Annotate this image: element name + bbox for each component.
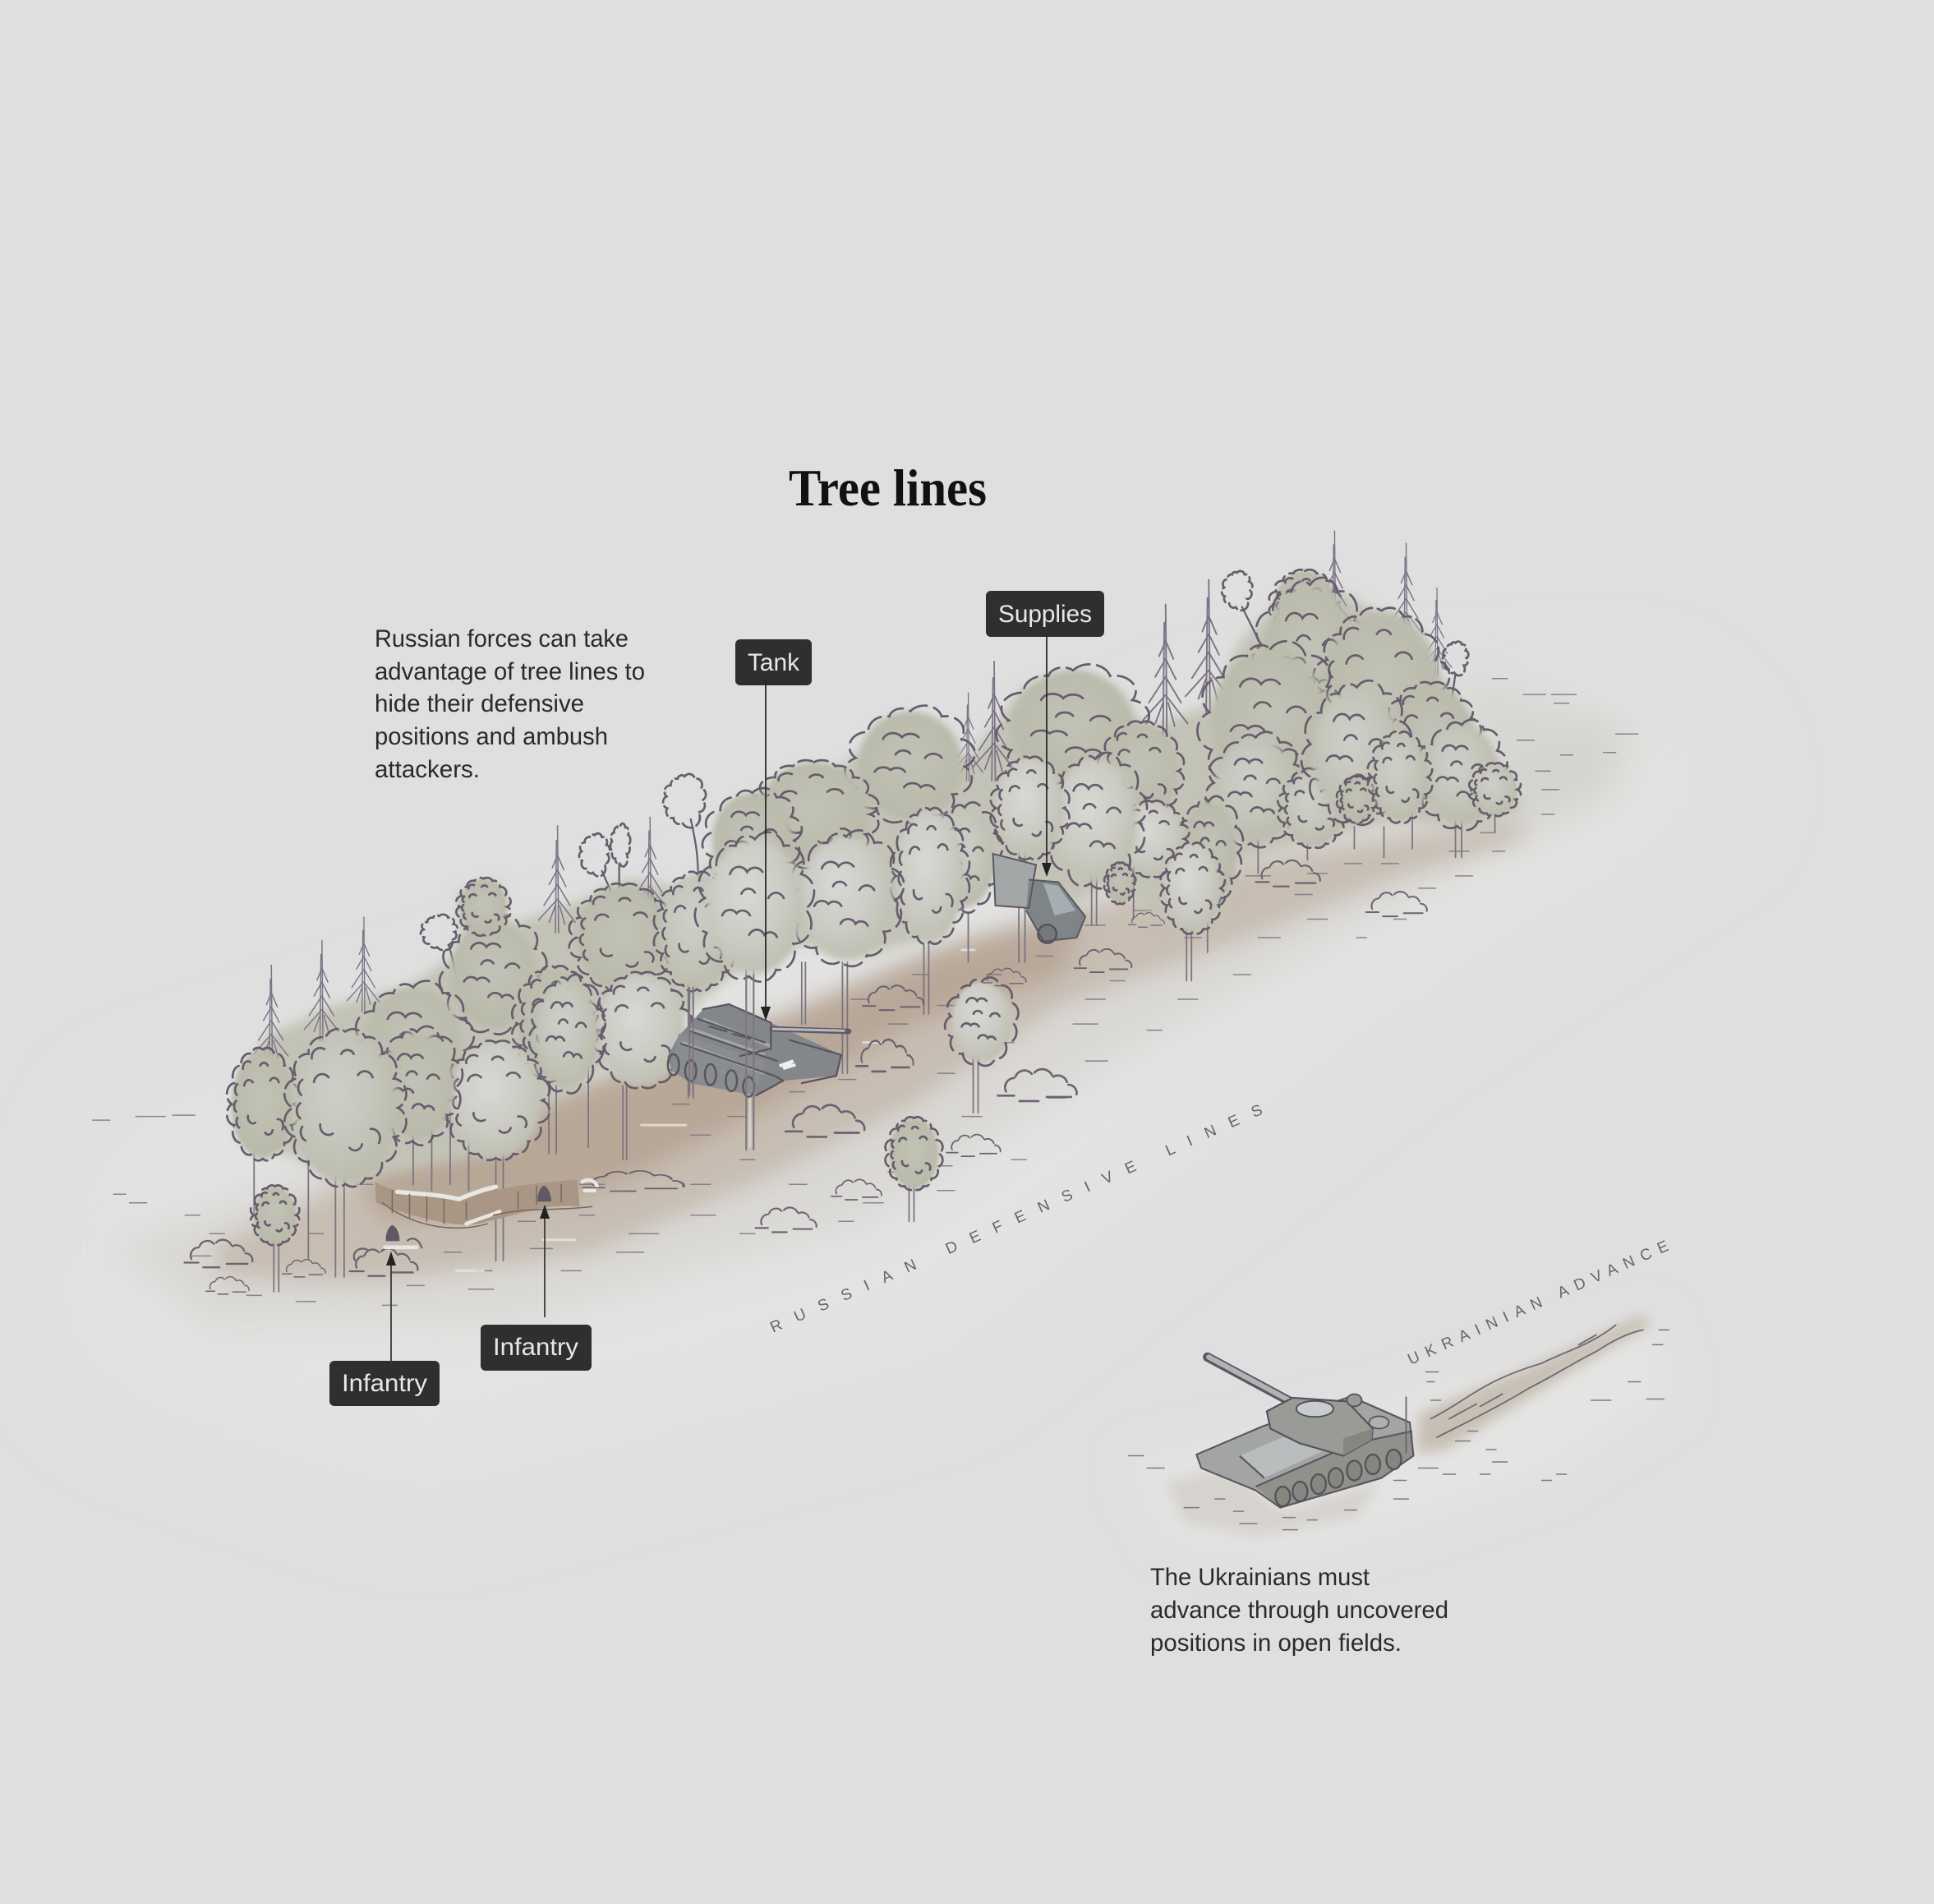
- text block: tree line description: positions and ambush: [375, 723, 608, 750]
- rotated label: Russian defensive lines: RUSSIAN DEFENSIVE LINES: [767, 1101, 1265, 1337]
- forest canopy mass: [234, 574, 1523, 1178]
- infantry soldier, trench: [537, 1186, 551, 1201]
- supply truck: [993, 854, 1085, 943]
- callout: Infantry right: [481, 1205, 592, 1371]
- Russian tank: [667, 1004, 849, 1097]
- illustration: Russian tree line: [49, 531, 1727, 1493]
- rotated label: Ukrainian advance: UKRAINIAN ADVANCE: [1405, 1238, 1671, 1369]
- text block: Ukrainian advance description: positions in open fields.: [1150, 1630, 1402, 1657]
- text block: tree line description: [375, 625, 645, 783]
- text block: tree line description: hide their defensive: [375, 690, 584, 717]
- ground wash: bare earth under the trees: [210, 820, 1523, 1283]
- text block: tree line description: advantage of tree lines to: [375, 658, 645, 685]
- trench: [375, 1179, 597, 1228]
- text block: tree line description: attackers.: [375, 756, 480, 783]
- ground wash: pale field: [49, 672, 1727, 1493]
- shrubs: [184, 860, 1427, 1294]
- foreground trunks over tank: [689, 975, 753, 1150]
- callout: Infantry right: Infantry: [493, 1334, 578, 1361]
- tree trunks: [254, 808, 1495, 1292]
- back row of trees: [352, 569, 1481, 1117]
- tank tracks in the mud: [1129, 1315, 1669, 1530]
- text block: Ukrainian advance description: [1150, 1564, 1448, 1657]
- background conifers: [254, 531, 1452, 1066]
- ground highlights: [456, 950, 974, 1270]
- front row of trees: [227, 680, 1521, 1187]
- illustration: Ukrainian tank and tracks: [1129, 1315, 1678, 1555]
- text block: Ukrainian advance description: The Ukrainians must: [1150, 1564, 1370, 1591]
- text block: Ukrainian advance description: advance through uncovered: [1150, 1597, 1448, 1624]
- tank gun barrel: [1208, 1357, 1290, 1401]
- title: Tree lines: [789, 459, 987, 517]
- callout: Supplies: Supplies: [998, 601, 1092, 628]
- text block: tree line description: Russian forces can take: [375, 625, 629, 652]
- infantry soldier, foxhole: [354, 1225, 421, 1261]
- callout: Infantry left: [329, 1252, 440, 1406]
- callout: Tank: [735, 639, 812, 1021]
- tank hull: [1196, 1396, 1413, 1508]
- ground dashes: [93, 679, 1638, 1305]
- ground wash around tank: [1129, 1320, 1678, 1555]
- callout: Tank: Tank: [748, 649, 800, 676]
- thin crowned snags on the skyline: [421, 571, 1468, 994]
- callout: Supplies: [986, 591, 1104, 877]
- tank turret: [1267, 1394, 1388, 1456]
- foreground small trees: [251, 977, 1018, 1245]
- callout: Infantry left: Infantry: [342, 1370, 427, 1397]
